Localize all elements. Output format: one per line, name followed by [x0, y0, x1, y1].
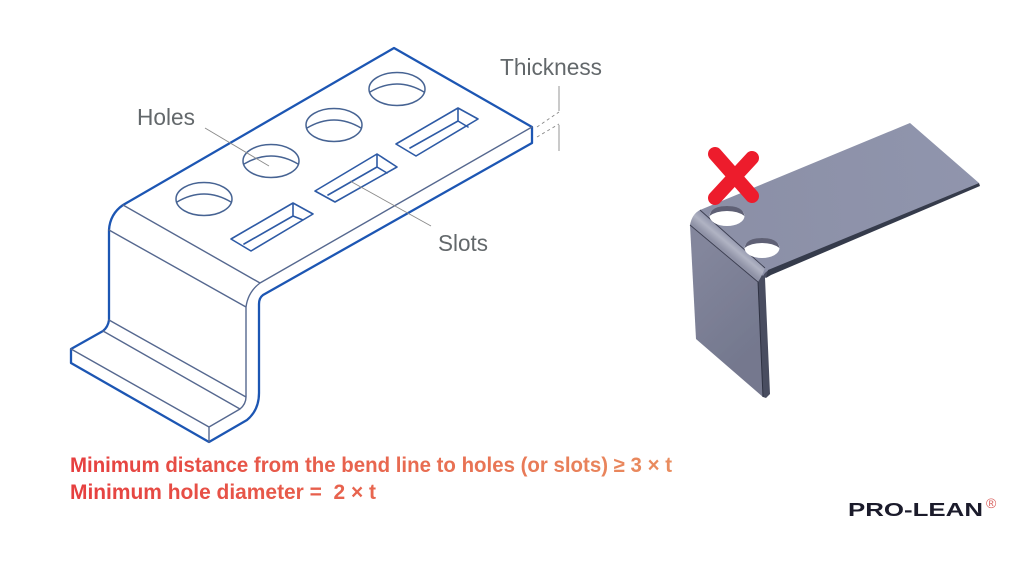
- label: Thickness: Thickness: [500, 54, 602, 80]
- plate thickness edge: [766, 183, 980, 278]
- bracket wall thickness edge: [758, 266, 772, 398]
- registered mark: ®: [986, 495, 997, 511]
- fold lines: [690, 210, 765, 282]
- hole 4: [369, 72, 425, 106]
- rule: minimum hole diameter: Minimum hole diameter = 2 × t: [70, 481, 376, 504]
- hole 2: [243, 144, 299, 178]
- bracket fold and edge lines: [71, 127, 532, 442]
- text: design rules: [70, 454, 672, 504]
- panel: isometric bracket line drawing: [71, 48, 532, 442]
- thickness dimension marks: [537, 86, 559, 151]
- logo: PRO-LEAN: [848, 495, 997, 520]
- label: Holes: Holes: [137, 104, 195, 130]
- rule: minimum distance: Minimum distance from the bend line to holes (or slots) ≥ 3 × t: [70, 454, 672, 477]
- slot 2: [315, 154, 397, 202]
- panel: 3D bracket render with holes too close to bend: [690, 123, 980, 398]
- slot 1: [231, 203, 313, 251]
- logo: PRO-LEAN: PRO-LEAN: [848, 500, 983, 520]
- leader line: slots: [350, 181, 431, 226]
- icon: red cross: [715, 154, 752, 198]
- bend radius highlight: [690, 210, 765, 282]
- hole near bend: [744, 238, 780, 258]
- label: Slots: Slots: [438, 230, 488, 256]
- slot 3: [396, 108, 478, 156]
- hole near top edge: [710, 206, 744, 226]
- bracket top plate: [700, 123, 979, 276]
- leader line: holes: [205, 128, 269, 166]
- hole 3: [306, 108, 362, 142]
- bracket outer outline: [71, 48, 532, 442]
- bracket vertical wall: [690, 225, 763, 397]
- hole 1: [176, 182, 232, 216]
